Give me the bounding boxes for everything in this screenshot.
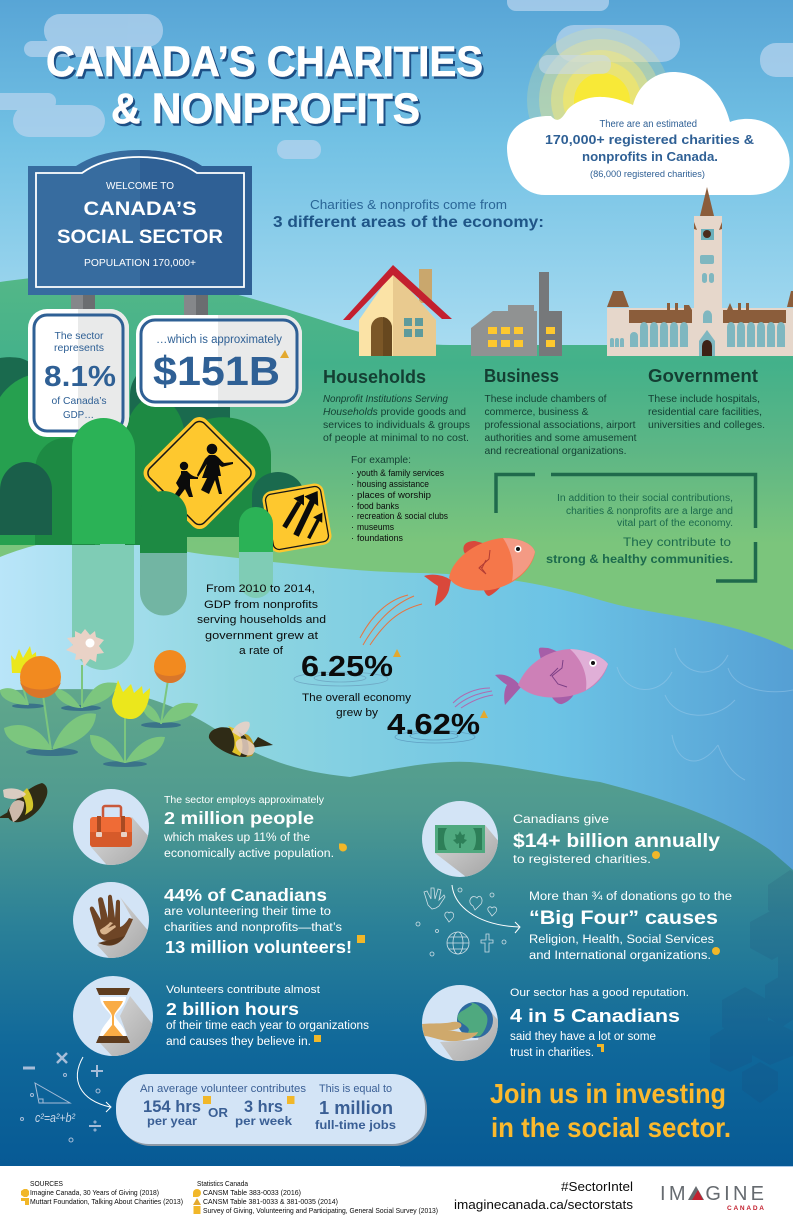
panel: government	[648, 366, 765, 431]
icon: bee left	[0, 783, 47, 822]
icon: hourglass circle	[73, 976, 153, 1056]
text: overall economy: grew by	[336, 707, 379, 719]
panel: government: universities and colleges.	[648, 419, 765, 431]
sources: CANSM Table 381-0033 & 381-0035 (2014)	[203, 1197, 338, 1206]
sky background	[0, 0, 793, 360]
board: 8.1% of GDP: represents	[54, 342, 104, 354]
panel: business: and recreational organizations.	[484, 445, 626, 457]
sources: Muttart Foundation, Talking About Charities (2013)	[30, 1197, 183, 1206]
text: 4 in 5 Canadians: said they have a lot or some	[510, 1031, 656, 1043]
icon: parliament	[607, 187, 793, 356]
icon: bee on hill	[209, 721, 273, 757]
text: overall economy	[302, 692, 412, 719]
cloud with estimate: (86,000 registered charities)	[590, 169, 705, 179]
board: 8.1% of GDP	[28, 309, 129, 437]
list: households examples: youth & family services	[357, 468, 445, 478]
flower meadow ground	[0, 689, 793, 1166]
list: households examples: ·	[351, 479, 354, 489]
list: households examples	[351, 455, 449, 543]
sources	[21, 1179, 438, 1215]
text: $14+ billion: Canadians give	[513, 814, 609, 826]
list: households examples: places of worship	[357, 490, 431, 500]
list: households examples: ·	[351, 501, 354, 511]
text: 2 million people: 2 million people	[164, 808, 314, 828]
panel: households: Households	[323, 367, 426, 387]
cloud with estimate: nonprofits in Canada.	[582, 149, 718, 164]
small tree	[140, 491, 187, 553]
icon: math doodles	[20, 1053, 111, 1142]
footer band	[0, 1166, 793, 1224]
call to action: Join us in investing	[490, 1078, 726, 1109]
text: Big Four causes: “Big Four” causes	[529, 908, 718, 929]
text: Big Four causes: and International organizations.	[529, 950, 711, 962]
list: households examples: housing assistance	[357, 479, 429, 489]
big foreground tree	[72, 418, 135, 544]
text: GDP growth: From 2010 to 2014,	[206, 583, 315, 595]
panel: government: Government	[648, 366, 758, 386]
list: households examples: For example:	[351, 455, 411, 466]
icon: orange fish	[424, 538, 535, 606]
panel: volunteer pill: per week	[235, 1114, 292, 1128]
text: 4 in 5 Canadians: Our sector has a good reputation.	[510, 987, 689, 999]
icon: donation doodles	[416, 885, 520, 956]
green hill	[0, 274, 793, 700]
economy heading	[273, 198, 544, 231]
call to action: in the social sector.	[491, 1112, 731, 1143]
text: 2 billion hours: Volunteers contribute almost	[166, 984, 320, 996]
callout: healthy communities: vital part of the economy.	[617, 518, 733, 529]
text: 44% of Canadians	[164, 885, 365, 957]
tree reflections	[72, 540, 273, 670]
text: $14+ billion	[513, 814, 720, 866]
hashtag and URL	[454, 1179, 634, 1212]
board: 8.1% of GDP: GDP…	[63, 409, 94, 421]
icon: flowers	[0, 629, 198, 767]
board: $151B: $151B	[153, 348, 280, 394]
water	[0, 538, 793, 900]
text: 4 in 5 Canadians: trust in charities.	[510, 1047, 594, 1059]
icon: globe in hand circle	[422, 985, 498, 1061]
text: 2 billion hours: of their time each year to organizations	[166, 1020, 369, 1032]
list: households examples: museums	[357, 522, 395, 532]
icon: factory	[471, 272, 562, 356]
text: Big Four causes: Religion, Health, Social Services	[529, 934, 714, 946]
list: households examples: foundations	[357, 533, 404, 543]
sources: SOURCES	[30, 1179, 63, 1188]
road sign: merge arrows	[261, 482, 333, 554]
text: 44% of Canadians: 44% of Canadians	[164, 885, 327, 905]
panel: government: These include hospitals,	[648, 393, 760, 405]
board: 8.1% of GDP: The sector	[54, 330, 104, 342]
icon: pink fish	[495, 648, 608, 705]
icon: banknote circle	[422, 801, 498, 877]
economy heading: 3 different areas of the economy:	[273, 214, 544, 231]
panel: business: Business	[484, 366, 559, 386]
panel: volunteer pill: 154 hrs	[143, 1097, 201, 1116]
text: 44% of Canadians: are volunteering their time to	[164, 906, 331, 918]
board: 8.1% of GDP: 8.1%	[44, 361, 116, 393]
callout: healthy communities: They contribute to	[623, 535, 731, 549]
text: $14+ billion: to registered charities.	[513, 852, 651, 866]
sources: Survey of Giving, Volunteering and Participating, General Social Survey (2013)	[203, 1206, 438, 1215]
stat: 6.25%	[294, 649, 401, 686]
panel: households	[323, 367, 470, 444]
panel: volunteer pill: full-time jobs	[315, 1118, 396, 1132]
text: 2 million people	[163, 795, 347, 860]
icon: math doodles: c²=a²+b²	[35, 1110, 76, 1125]
hashtag and URL: imaginecanada.ca/sectorstats	[454, 1197, 634, 1212]
title	[46, 38, 483, 133]
cloud with estimate: 170,000+ registered charities &	[545, 132, 754, 147]
list: households examples: recreation & social clubs	[357, 511, 449, 521]
panel: business: authorities and some amusement	[484, 432, 637, 444]
welcome sign: CANADA’S	[84, 199, 196, 220]
panel: volunteer pill: This is equal to	[319, 1083, 392, 1095]
welcome sign	[28, 150, 252, 295]
small bright tree	[239, 507, 273, 552]
cloud with estimate: There are an estimated	[600, 119, 697, 130]
panel: households: Households provide goods and	[323, 406, 466, 418]
panel: households: services to individuals & groups	[323, 419, 470, 431]
text: 44% of Canadians: 13 million volunteers!	[165, 937, 352, 957]
title: & NONPROFITS	[111, 85, 420, 133]
text: GDP growth	[197, 583, 326, 657]
cloud with estimate	[507, 72, 790, 195]
title: CANADA’S CHARITIES	[46, 38, 483, 86]
text: GDP growth: a rate of	[239, 645, 284, 657]
economy heading: Charities & nonprofits come from	[310, 198, 507, 212]
callout: healthy communities: In addition to their social contributions,	[557, 493, 733, 504]
logo: Imagine Canada: IMAGINE	[660, 1183, 764, 1205]
text: 4 in 5 Canadians: 4 in 5 Canadians	[510, 1005, 680, 1026]
panel: volunteer pill: 1 million	[319, 1098, 393, 1118]
panel: households: of people at minimal to no cost.	[323, 432, 469, 444]
water ripples	[617, 648, 793, 780]
call to action	[490, 1078, 731, 1143]
sources: Statistics Canada	[197, 1179, 249, 1188]
stat: 6.25%: 6.25%	[301, 651, 393, 683]
list: households examples: ·	[351, 511, 354, 521]
sources: Imagine Canada, 30 Years of Giving (2018)	[30, 1188, 159, 1197]
text: 4 in 5 Canadians	[510, 987, 689, 1059]
board: $151B	[136, 315, 302, 407]
hashtag and URL: #SectorIntel	[561, 1179, 633, 1194]
background trees	[0, 355, 304, 545]
panel: volunteer pill: OR	[208, 1106, 228, 1120]
panel: households: Nonprofit Institutions Serving	[323, 393, 448, 405]
panel: government: residential care facilities,	[648, 406, 762, 418]
panel: business: These include chambers of	[484, 393, 607, 405]
text: 2 million people: The sector employs approximately	[164, 795, 324, 806]
text: Big Four causes	[529, 891, 732, 962]
list: households examples: food banks	[357, 501, 400, 511]
text: 2 billion hours	[166, 984, 369, 1048]
panel: business: commerce, business &	[484, 406, 588, 418]
panel: volunteer pill	[116, 1074, 427, 1146]
panel: volunteer pill: 3 hrs	[244, 1097, 283, 1116]
sources: CANSM Table 383-0033 (2016)	[203, 1188, 301, 1197]
welcome sign: POPULATION 170,000+	[84, 258, 196, 269]
road sign: school crossing	[139, 413, 260, 533]
icon: briefcase circle	[73, 789, 149, 865]
text: GDP growth: government grew at	[205, 630, 318, 642]
icon: house	[343, 265, 452, 356]
text: 2 million people: economically active population.	[164, 848, 334, 860]
text: Big Four causes: More than ¾ of donations go to the	[529, 891, 732, 903]
text: 2 million people: which makes up 11% of the	[163, 832, 310, 844]
motion lines: orange fish	[360, 595, 422, 645]
board: 8.1% of GDP: of Canada’s	[52, 395, 106, 407]
callout: healthy communities: strong & healthy communities.	[546, 552, 733, 566]
welcome sign: SOCIAL SECTOR	[57, 227, 223, 248]
text: 44% of Canadians: charities and nonprofits—that’s	[164, 922, 342, 934]
motion lines: pink fish	[453, 688, 493, 708]
list: households examples: ·	[351, 468, 354, 478]
panel: volunteer pill: per year	[147, 1114, 197, 1128]
sun	[527, 28, 671, 172]
list: households examples: ·	[351, 490, 354, 500]
panel: business: professional associations, airport	[484, 419, 636, 431]
hexagons	[710, 870, 793, 1103]
list: households examples: ·	[351, 533, 354, 543]
icon: hands circle	[73, 882, 149, 958]
list: households examples: ·	[351, 522, 354, 532]
sign posts	[71, 295, 208, 321]
text: GDP growth: serving households and	[197, 614, 326, 626]
text: overall economy: The overall economy	[302, 692, 412, 704]
text: 2 billion hours: and causes they believe in.	[166, 1036, 311, 1048]
text: GDP growth: GDP from nonprofits	[204, 599, 319, 611]
panel: volunteer pill: An average volunteer contributes	[140, 1083, 307, 1095]
callout: healthy communities	[496, 474, 756, 581]
pale background clouds	[0, 0, 793, 159]
panel: business	[484, 366, 637, 457]
text: $14+ billion: $14+ billion annually	[513, 831, 720, 852]
callout: healthy communities: charities & nonprofits are a large and	[566, 506, 733, 517]
welcome sign: WELCOME TO	[106, 181, 174, 192]
text: 2 billion hours: 2 billion hours	[166, 999, 299, 1019]
stat: 4.62%: 4.62%	[387, 709, 480, 741]
logo: Imagine Canada: CANADA	[727, 1205, 764, 1212]
board: $151B: …which is approximately	[156, 334, 282, 346]
